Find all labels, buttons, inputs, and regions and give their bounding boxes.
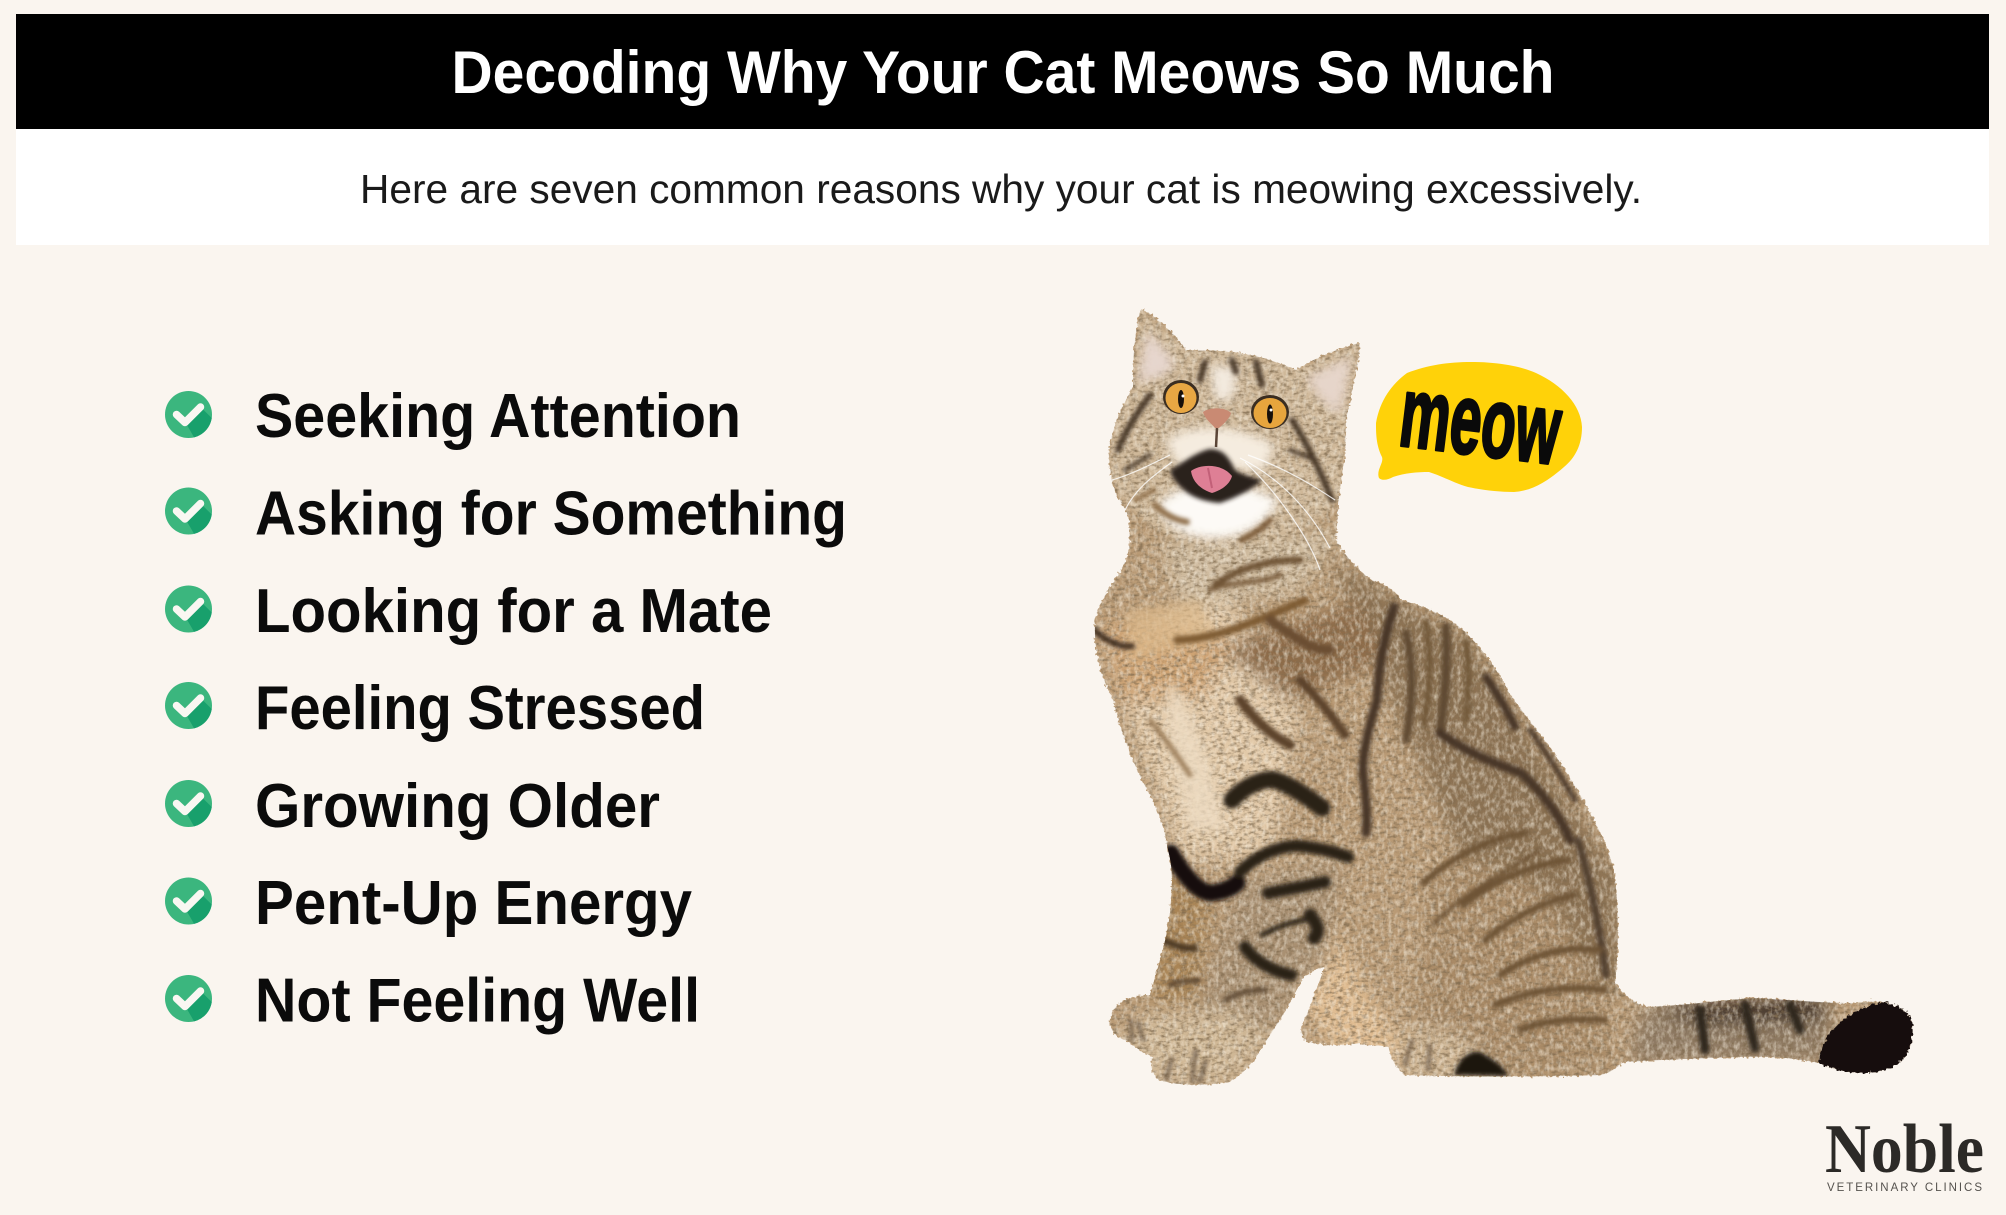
- subtitle: Here are seven common reasons why your cat is meowing excessively.: [360, 166, 1642, 212]
- cat shading and markings: [1090, 300, 1920, 1090]
- title banner: [16, 14, 1989, 129]
- reason 4: Feeling Stressed: [255, 674, 705, 743]
- reason 2: Asking for Something: [255, 480, 847, 548]
- eye rims: [1163, 380, 1199, 414]
- illustration: tabby cat: [1090, 300, 1920, 1090]
- right eye: [1254, 398, 1286, 428]
- dark hind toe: [1454, 1052, 1508, 1076]
- nose: [1203, 408, 1231, 428]
- speech bubble: [1376, 356, 1582, 492]
- paw toes: [1131, 1020, 1430, 1082]
- tail tuft: [1819, 1002, 1913, 1073]
- cat head base: [1110, 309, 1359, 545]
- logo: Noble Veterinary Clinics: [1825, 1111, 1984, 1194]
- logo wordmark: Noble: [1825, 1111, 1984, 1188]
- subtitle panel: [16, 129, 1989, 245]
- reason 3: Looking for a Mate: [255, 577, 772, 646]
- whiskers: [1112, 455, 1335, 570]
- left eye: [1166, 383, 1196, 413]
- tongue: [1191, 466, 1232, 493]
- cat silhouette: [1095, 309, 1913, 1085]
- reason 5: Growing Older: [255, 772, 660, 841]
- meow lettering: meow: [1394, 356, 1567, 486]
- mouth: [1170, 449, 1262, 503]
- fur texture: [1090, 300, 1920, 1090]
- reason 1: Seeking Attention: [255, 382, 741, 451]
- tabby stripes: [1094, 360, 1800, 1050]
- reason 7: Not Feeling Well: [255, 966, 700, 1036]
- reason 6: Pent-Up Energy: [255, 869, 692, 938]
- checklist of reasons: [165, 382, 847, 1036]
- cat face: [1112, 380, 1335, 570]
- title: Decoding Why Your Cat Meows So Much: [452, 39, 1554, 106]
- logo tagline: VETERINARY CLINICS: [1827, 1182, 1982, 1194]
- light face and chest patches: [1125, 330, 1352, 830]
